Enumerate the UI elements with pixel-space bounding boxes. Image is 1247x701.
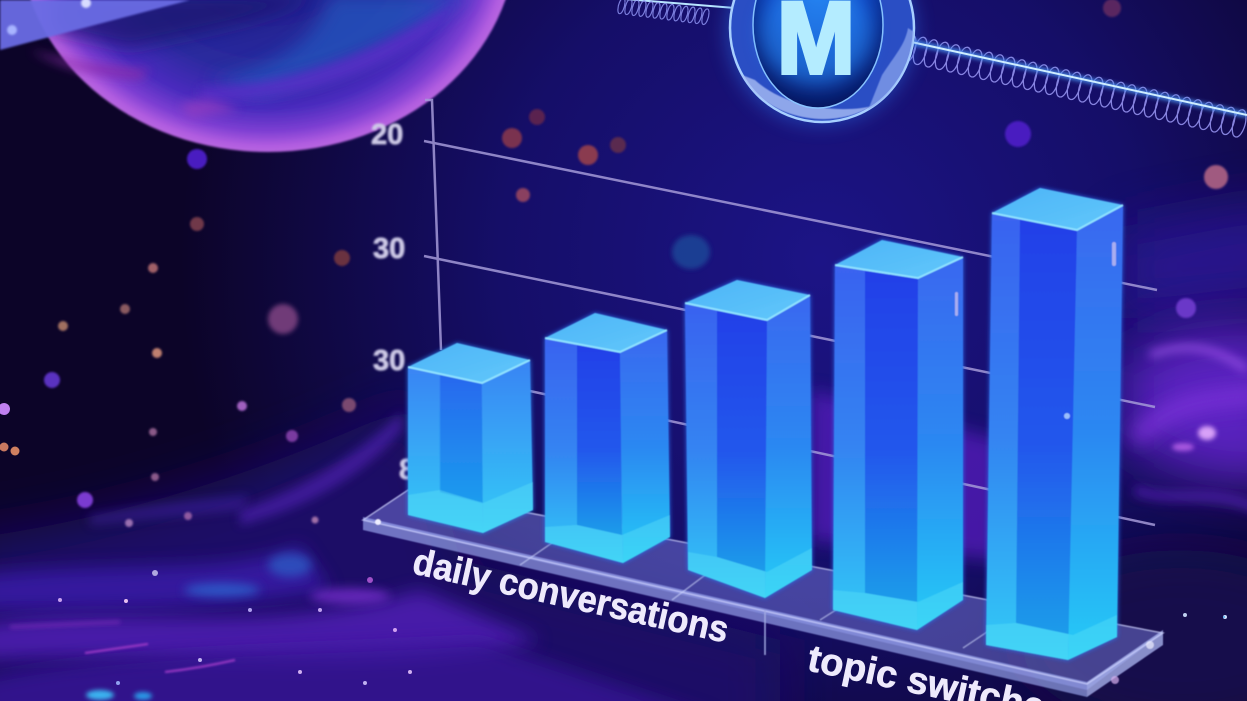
M logo ring bbox=[725, 0, 917, 126]
y axis labels bbox=[371, 119, 415, 486]
bar 5 bbox=[986, 188, 1123, 660]
y axis labels: 30 bbox=[373, 345, 405, 377]
bar 2 bbox=[545, 313, 670, 563]
y axis labels: 30 bbox=[373, 233, 405, 265]
helix beam right bbox=[891, 32, 1247, 137]
planet bbox=[20, 0, 516, 152]
purple nebula waves bbox=[0, 200, 1247, 701]
y axis labels: 20 bbox=[371, 119, 403, 151]
y axis labels: 8 bbox=[399, 454, 415, 486]
bar 3 bbox=[685, 280, 812, 598]
bar 4 bbox=[833, 240, 963, 630]
helix beam left bbox=[600, 0, 735, 24]
bar 1 bbox=[408, 343, 533, 533]
chart axis and grid bbox=[424, 100, 1157, 525]
category label: daily conversations: daily conversations bbox=[409, 541, 733, 651]
glass platform bbox=[363, 490, 1163, 697]
glass panel corner bbox=[0, 0, 190, 50]
